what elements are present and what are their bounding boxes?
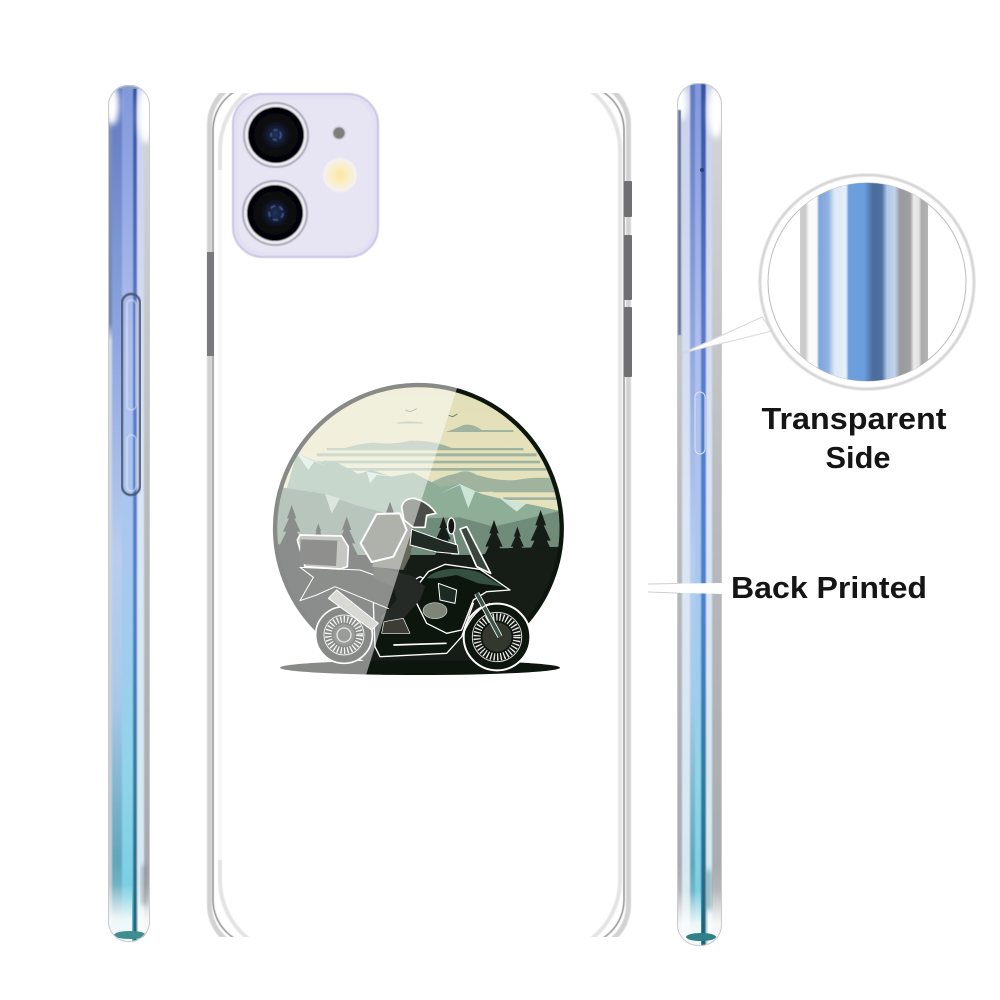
helmet [402, 498, 436, 527]
upper lens [244, 103, 308, 167]
rider arm [410, 529, 459, 554]
back printed pointer bar [648, 583, 722, 594]
exhaust [328, 590, 378, 630]
front wheel [464, 604, 530, 670]
glass highlight over left of emblem [260, 377, 461, 678]
upper dark edge segment [678, 110, 681, 335]
flash [323, 158, 357, 192]
motorcycle and rider [297, 498, 530, 670]
top box [297, 535, 348, 569]
emblem ring [275, 385, 562, 631]
center phone case outline [210, 75, 628, 955]
left side view of transparent case [108, 85, 150, 942]
left grey bar [207, 252, 214, 356]
back printed label: Back Printed [731, 570, 927, 605]
transparent side label: Transparent [762, 401, 946, 436]
magnifier lens ring [760, 175, 974, 389]
magnifier pointer [683, 317, 772, 353]
mirror [448, 518, 457, 548]
lower exhaust pipe [393, 643, 447, 645]
windscreen [460, 527, 491, 573]
side label second line: Side [826, 440, 890, 475]
sky and mountains circle [277, 387, 560, 661]
microphone [332, 126, 346, 140]
lower bike mass [373, 577, 473, 657]
right side view of transparent case [677, 83, 722, 946]
engine cylinder [423, 603, 447, 619]
rear wheel [316, 607, 372, 663]
lower lens [243, 181, 307, 245]
side panel [438, 583, 457, 603]
right grey buttons [624, 181, 632, 377]
magnifier callout [683, 175, 974, 389]
birds [405, 409, 457, 417]
rear subframe [300, 567, 407, 613]
side buttons [122, 294, 140, 495]
rider leg [373, 565, 425, 623]
backpack [361, 513, 407, 562]
rider boot [382, 618, 410, 633]
side button outline [695, 392, 705, 454]
ground shadow [280, 660, 560, 675]
printed motorcycle emblem [272, 382, 564, 675]
camera module [233, 94, 378, 257]
front fork [477, 593, 500, 637]
front fender [463, 603, 490, 633]
camera dot [700, 168, 704, 172]
magnified stripes [800, 180, 928, 384]
rider torso [372, 513, 415, 570]
bike tank and fairing [417, 564, 510, 633]
